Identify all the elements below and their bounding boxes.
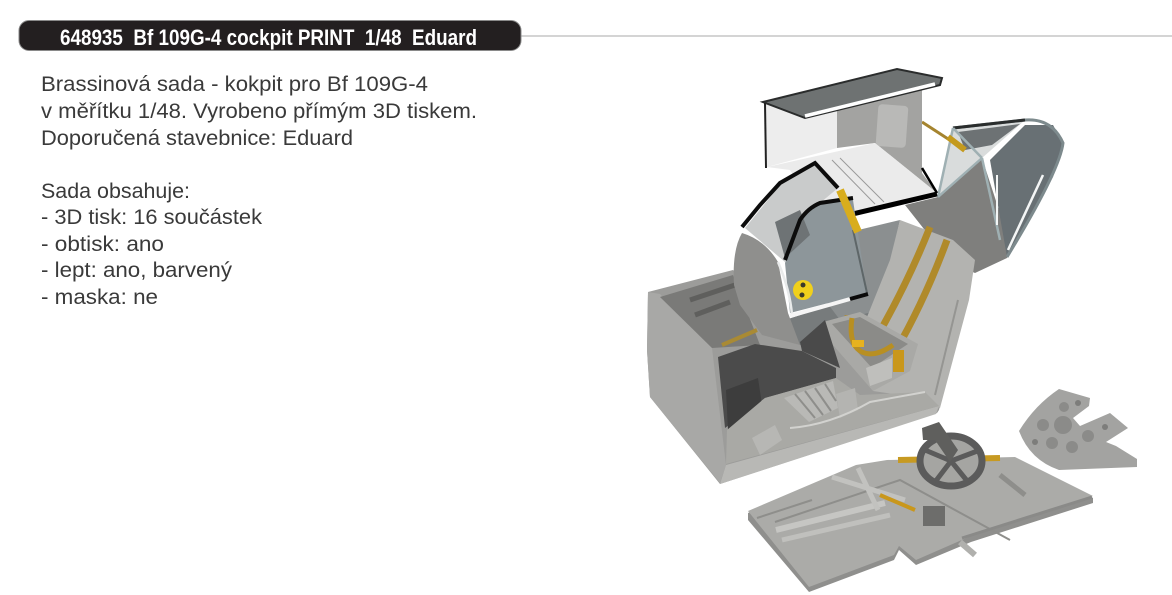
text block: contents list: - maska: ne bbox=[41, 286, 158, 309]
illustration: floor plate bbox=[748, 457, 1093, 592]
text block: contents list: - 3D tisk: 16 součástek bbox=[41, 206, 263, 229]
illustration: cockpit backing behind windscreen bbox=[785, 220, 905, 350]
icon: yellow decal bbox=[793, 280, 813, 300]
text block: description bbox=[41, 73, 477, 150]
illustration: rear glass box bbox=[763, 69, 942, 222]
text block: contents list: Sada obsahuje: bbox=[41, 180, 190, 203]
illustration: rear canopy section bbox=[905, 120, 1063, 273]
text block: contents list: - obtisk: ano bbox=[41, 233, 164, 256]
title bar: 648935 Bf 109G-4 cockpit PRINT 1/48 Eduard bbox=[60, 25, 477, 50]
illustration: front canopy bbox=[742, 163, 868, 316]
text block: contents list bbox=[41, 180, 263, 309]
text block: description: Doporučená stavebnice: Eduard bbox=[41, 127, 353, 150]
illustration: seat back with harness bbox=[848, 220, 975, 408]
illustration: armor head plate bbox=[734, 233, 800, 345]
text block: contents list: - lept: ano, barvený bbox=[41, 259, 233, 282]
illustration: instrument panel bbox=[1019, 389, 1137, 470]
text block: description: v měřítku 1/48. Vyrobeno přímým 3D tiskem. bbox=[41, 100, 477, 123]
text block: description: Brassinová sada - kokpit pro Bf 109G-4 bbox=[41, 73, 428, 96]
illustration: control wheel bbox=[898, 422, 1000, 486]
illustration: rudder housing and floor details bbox=[718, 320, 939, 464]
illustration: seat pan bbox=[823, 312, 918, 391]
illustration: tub outer wall bbox=[647, 270, 968, 484]
